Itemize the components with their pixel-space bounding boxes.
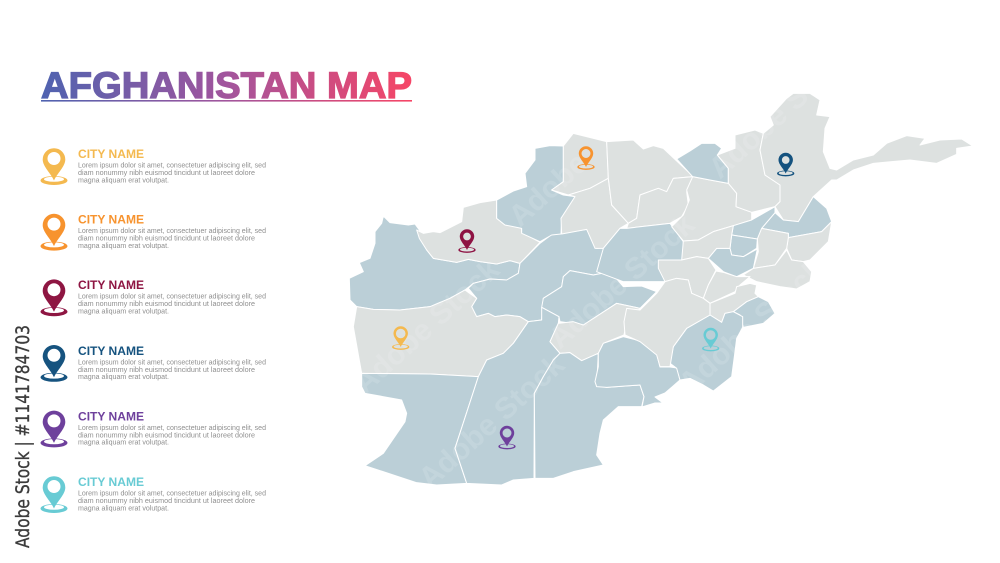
list item: orange city: CITY NAME — [78, 213, 144, 227]
title: AFGHANISTAN MAP — [41, 64, 412, 106]
list item: maroon city — [40, 278, 266, 316]
pin: teal — [702, 328, 719, 351]
list item: orange city: Lorem ipsum dolor sit amet, consectetuer adipiscing elit, sed — [78, 228, 266, 235]
watermark: Adobe Stock — [703, 38, 861, 185]
list item: purple city: Lorem ipsum dolor sit amet, consectetuer adipiscing elit, sed — [78, 425, 266, 432]
list item: purple city: magna aliquam erat volutpat. — [78, 440, 169, 447]
list item: purple city: CITY NAME — [78, 409, 144, 423]
northeast and east provinces — [624, 93, 973, 391]
watermark: Adobe — [503, 146, 594, 233]
list item: navy city: Lorem ipsum dolor sit amet, consectetuer adipiscing elit, sed — [78, 359, 266, 366]
list item: orange city: magna aliquam erat volutpat. — [78, 243, 169, 250]
list item: maroon city: magna aliquam erat volutpat. — [78, 308, 169, 316]
pin: purple — [498, 426, 516, 449]
map of Afghanistan — [349, 93, 973, 485]
list item: gold city: Lorem ipsum dolor sit amet, consectetuer adipiscing elit, sed — [78, 162, 266, 170]
list item: navy city — [40, 344, 266, 382]
list item: navy city: diam nonummy nibh euismod tincidunt ut laoreet dolore — [78, 367, 255, 374]
pin: maroon — [458, 229, 476, 253]
stock id vertical text: Adobe Stock | #1141784703 — [12, 325, 34, 548]
list item: gold city: diam nonummy nibh euismod tincidunt ut laoreet dolore — [78, 170, 255, 177]
pin: orange — [577, 146, 595, 170]
list item: orange city: diam nonummy nibh euismod tincidunt ut laoreet dolore — [78, 236, 255, 243]
list item: teal city: magna aliquam erat volutpat. — [78, 505, 169, 512]
watermark: Adobe Stock — [413, 348, 571, 495]
list item: teal city: Lorem ipsum dolor sit amet, consectetuer adipiscing elit, sed — [78, 490, 266, 498]
list item: navy city: CITY NAME — [78, 344, 144, 358]
list item: purple city — [40, 409, 266, 447]
list item: maroon city: Lorem ipsum dolor sit amet, consectetuer adipiscing elit, sed — [78, 294, 266, 301]
watermark: Adobe Stock — [543, 208, 701, 355]
watermark: Adobe Stock — [673, 253, 831, 400]
list item: gold city: CITY NAME — [78, 147, 144, 161]
list item: teal city — [40, 475, 266, 513]
list item: purple city: diam nonummy nibh euismod tincidunt ut laoreet dolore — [78, 432, 255, 439]
list item: gold city: magna aliquam erat volutpat. — [78, 177, 169, 184]
list item: gold city — [40, 147, 266, 185]
list item: teal city: diam nonummy nibh euismod tincidunt ut laoreet dolore — [78, 498, 255, 505]
watermark: Adobe Stock — [348, 253, 506, 400]
list item: orange city — [40, 213, 266, 251]
list item: teal city: CITY NAME — [78, 475, 144, 489]
map pins — [392, 146, 794, 449]
northern provinces — [497, 133, 693, 282]
watermark — [348, 38, 861, 495]
southwest provinces — [349, 200, 680, 485]
list item: maroon city: CITY NAME — [78, 278, 144, 292]
list item: maroon city: diam nonummy nibh euismod tincidunt ut laoreet dolore — [78, 301, 255, 308]
pin: navy — [777, 153, 794, 176]
list item: navy city: magna aliquam erat volutpat. — [78, 374, 169, 381]
city list — [40, 147, 266, 513]
pin: gold — [392, 326, 409, 350]
